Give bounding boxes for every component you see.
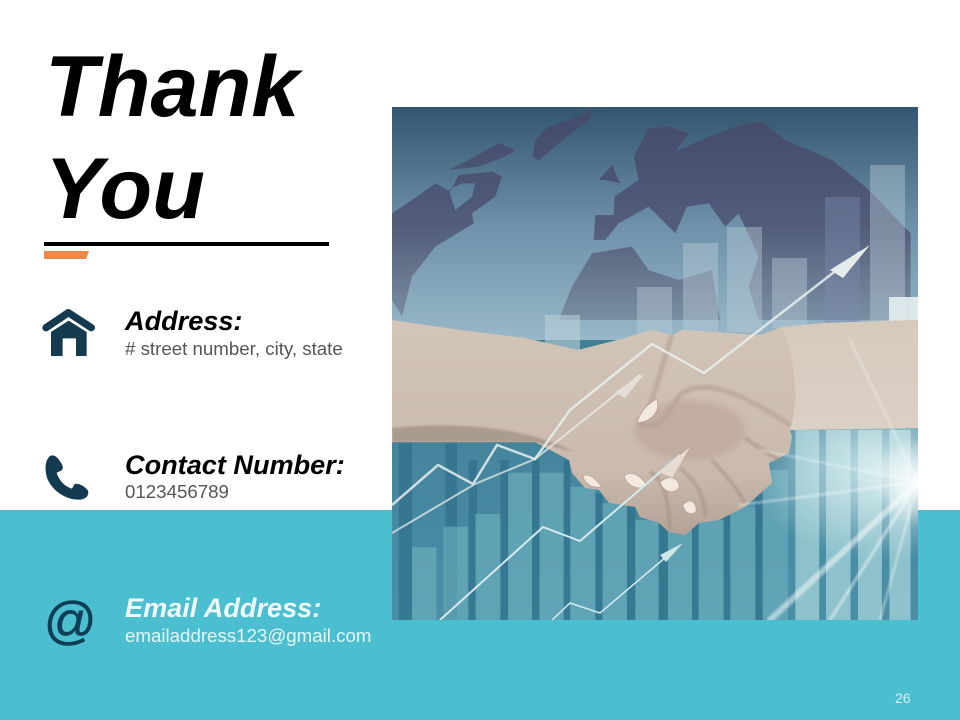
left arm shadow [392,425,575,452]
fingernails [583,399,696,514]
email block: Email Address: [125,592,321,623]
arms and hand [392,320,918,535]
teal footer band [0,510,960,720]
teal chart background [392,340,918,620]
world map landmass [392,108,911,320]
address block: Address: [125,305,242,336]
photo: handshake over globe and charts [392,107,918,620]
contact block [125,449,345,502]
address block [124,305,343,359]
email block [125,592,371,646]
icon: at sign: @ [43,592,96,650]
contact block: 0123456789 [125,481,229,502]
email block: emailaddress123@gmail.com [125,625,371,646]
glow on right bars [750,380,960,560]
growth arrows [392,245,870,620]
background bars lower [399,430,911,620]
orange accent [44,251,89,259]
hand shading [640,335,790,426]
handshake [392,320,918,535]
title: You [45,141,205,237]
right arm [782,320,918,430]
title underline [44,242,329,246]
title: Thank [45,39,299,135]
background bars upper [545,165,918,355]
contact block: Contact Number: [125,449,345,480]
sky background [392,107,918,347]
sun flare [740,340,960,620]
address block: # street number, city, state [125,338,343,359]
icon: phone [46,455,88,500]
icon: house [42,309,95,356]
page number: 26 [895,690,911,706]
title [45,39,303,237]
